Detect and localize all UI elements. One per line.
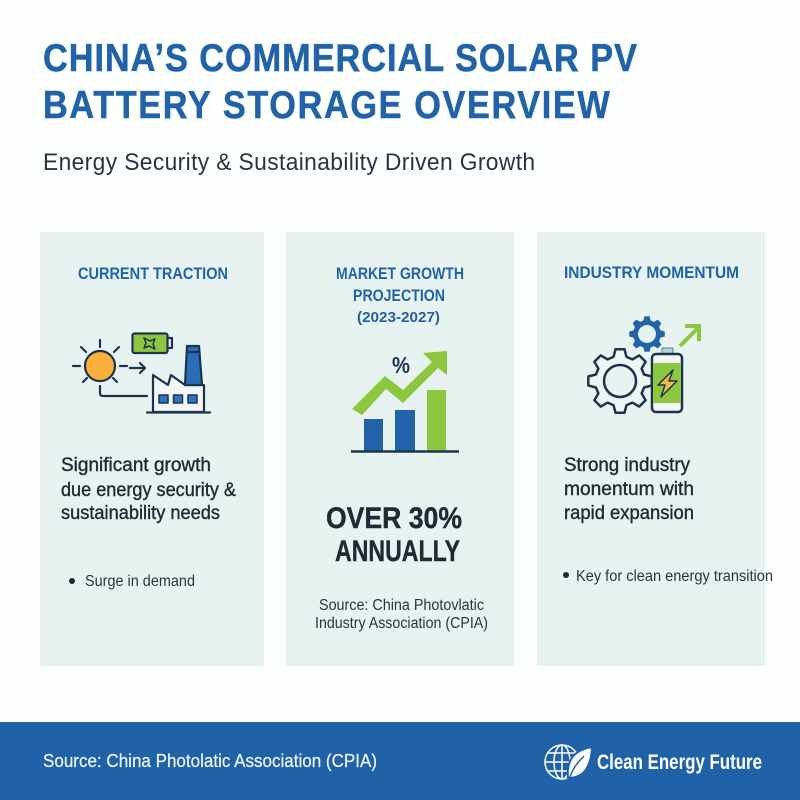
source note (315, 597, 488, 632)
heading: current traction: CURRENT TRACTION (78, 265, 228, 283)
text: momentum description: rapid expansion (564, 502, 694, 524)
bullet: surge in demand: Surge in demand (85, 573, 195, 590)
text: momentum description (564, 454, 694, 524)
source note: Source: China Photovlatic (319, 597, 484, 614)
title (43, 36, 637, 126)
text: growth description: due energy security & (61, 479, 236, 501)
text: growth description (61, 454, 236, 524)
source note: Industry Association (CPIA) (315, 615, 488, 632)
stat: over 30% annually: OVER 30% (326, 502, 462, 535)
panel: industry momentum (537, 232, 773, 666)
heading: market growth projection: MARKET GROWTH (336, 265, 464, 283)
heading: market growth projection (336, 265, 464, 326)
text: growth description: Significant growth (61, 454, 211, 476)
title: CHINA’S COMMERCIAL SOLAR PV (43, 36, 637, 79)
footer source: Source: China Photolatic Association (CPIA) (43, 751, 377, 771)
text: growth description: sustainability needs (61, 502, 220, 524)
footer band (0, 722, 800, 800)
icon: growth chart (351, 351, 459, 452)
panel: current traction (40, 232, 264, 666)
panel: market growth projection (286, 232, 514, 666)
stat: over 30% annually: ANNUALLY (335, 535, 460, 568)
footer brand: Clean Energy Future (597, 751, 762, 774)
icon: globe and leaf (545, 745, 592, 779)
icon: gears, battery and arrow (588, 316, 699, 413)
subtitle: Energy Security & Sustainability Driven Growth (43, 148, 535, 175)
heading: market growth projection: (2023-2027) (357, 309, 440, 326)
stat: over 30% annually (326, 502, 462, 568)
bullet: key for clean energy transition: Key for clean energy transition (576, 568, 773, 585)
icon: growth chart: % (392, 352, 410, 378)
heading: industry momentum: INDUSTRY MOMENTUM (564, 264, 739, 282)
icon: sun, battery and factory (73, 334, 210, 412)
title: BATTERY STORAGE OVERVIEW (43, 83, 610, 126)
text: momentum description: Strong industry (564, 454, 690, 476)
heading: market growth projection: PROJECTION (353, 287, 445, 305)
text: momentum description: monentum with (564, 478, 694, 500)
